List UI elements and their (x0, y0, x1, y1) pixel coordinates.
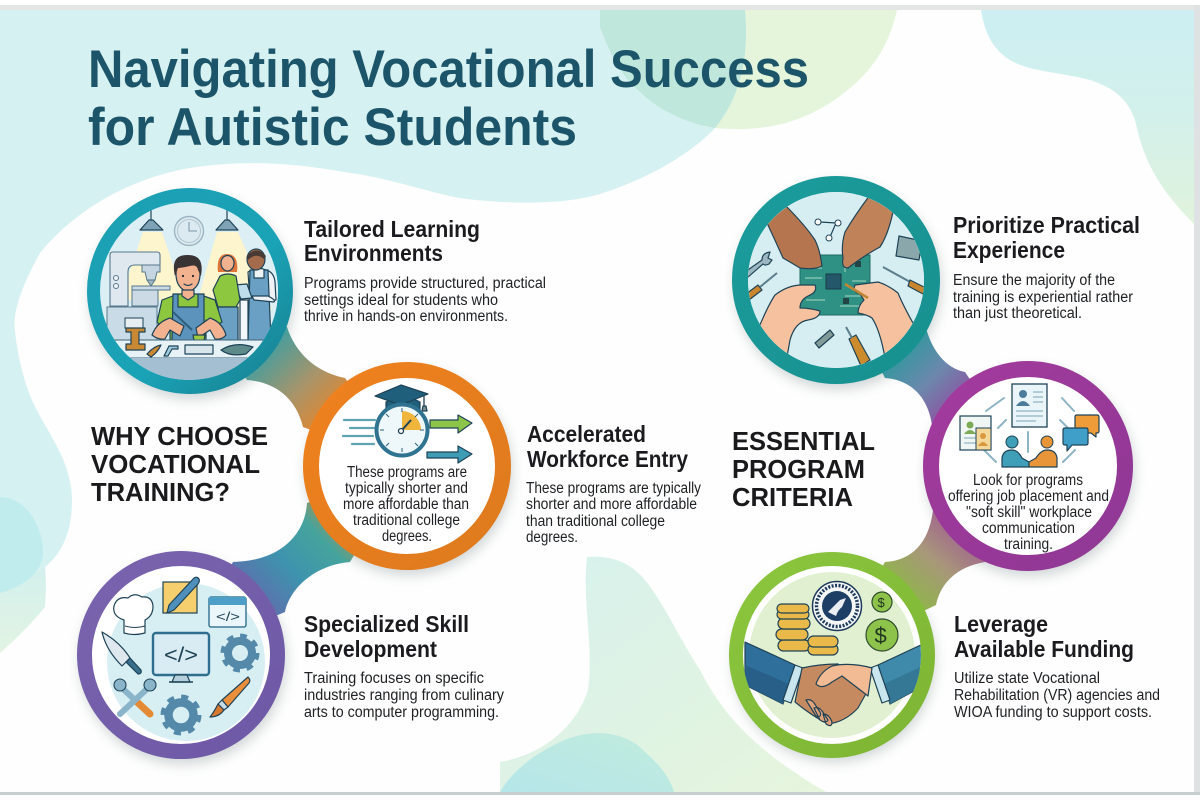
heading: accelerated workforce entry: Workforce Entry (527, 446, 688, 472)
text: accelerated entry in circle (343, 464, 469, 545)
instructor with tablet (234, 249, 276, 341)
text: accelerated entry in circle: degrees. (382, 528, 432, 545)
text: tailored learning description (304, 275, 546, 325)
text: accelerated entry description (526, 480, 701, 546)
icon: skills tools cluster (102, 577, 265, 741)
wrench and screwdriver (122, 688, 150, 714)
connector: tailored learning to accelerated entry (190, 291, 407, 466)
panel: specialized skill development (84, 558, 504, 752)
text: funding description: WIOA funding to support costs. (954, 704, 1152, 721)
title: Navigating Vocational Success (88, 40, 809, 99)
gears (163, 636, 257, 733)
text: job placement in circle: offering job placement and (948, 488, 1109, 505)
magenta ring (931, 369, 1125, 563)
heading: essential program criteria: CRITERIA (732, 482, 853, 512)
connector: job placement to funding (832, 466, 1028, 655)
handshake (795, 664, 868, 724)
icon: hands assembling circuit board (745, 190, 926, 370)
text: funding description: Rehabilitation (VR) agencies and (954, 687, 1160, 704)
text: accelerated entry in circle: typically shorter and (345, 480, 468, 497)
text: job placement in circle: "soft skill" workplace (966, 504, 1092, 521)
green ring (736, 559, 928, 751)
text: specialized skill description: Training focuses on specific (304, 670, 484, 687)
dollar coins (872, 592, 892, 612)
text: job placement in circle: training. (1004, 536, 1053, 553)
heading: prioritize practical experience: Experience (953, 237, 1065, 263)
sleeves (745, 642, 795, 704)
icon: resumes people and speech bubbles (960, 384, 1099, 467)
text: job placement in circle: Look for programs (973, 472, 1083, 489)
panel: leverage available funding (736, 559, 1160, 751)
text: practical experience description: Ensure the majority of the (953, 272, 1115, 289)
heading: tailored learning: Tailored Learning (304, 216, 480, 242)
text: accelerated entry in circle: traditional college (353, 512, 460, 529)
panel: job placement and soft skills (931, 369, 1125, 563)
hand: lower left (760, 284, 821, 354)
coins (776, 604, 838, 655)
heading: essential program criteria: ESSENTIAL (732, 426, 875, 456)
connector: accelerated entry to specialized skills (181, 466, 407, 655)
text: practical experience description: training is experiential rather (953, 289, 1133, 306)
heading: why choose vocational training (91, 421, 268, 507)
teal ring (94, 196, 286, 386)
text: tailored learning description: Programs provide structured, practical (304, 275, 546, 292)
hand: upper right (842, 198, 894, 269)
heading: accelerated workforce entry: Accelerated (527, 421, 646, 447)
teal ring (740, 184, 932, 376)
panel: accelerated workforce entry (311, 370, 701, 562)
heading: tailored learning: Environments (304, 240, 443, 266)
text: funding description (954, 670, 1160, 721)
text: practical experience description: than just theoretical. (953, 305, 1082, 322)
knife (102, 632, 130, 666)
icon: coins badge and handshake: $ (878, 595, 886, 610)
heading: tailored learning (304, 216, 480, 266)
workbench (114, 318, 264, 380)
code window (209, 597, 246, 627)
icon: timer with graduation cap and arrows (343, 385, 472, 463)
note and pen (163, 582, 197, 613)
text: accelerated entry description: These programs are typically (526, 480, 701, 497)
student with orange hair (213, 254, 240, 341)
heading: accelerated workforce entry (527, 421, 688, 472)
heading: why choose vocational training: VOCATIONAL (91, 449, 260, 479)
main student (152, 255, 226, 346)
heading: why choose vocational training: WHY CHOOSE (91, 421, 268, 451)
heading: specialized skill development (304, 611, 469, 662)
icon: skills tools cluster: </> (164, 644, 198, 667)
title: for Autistic Students (88, 98, 577, 157)
program badge (812, 582, 862, 630)
heading: essential program criteria (732, 426, 875, 512)
milling machine (107, 252, 170, 341)
text: accelerated entry description: shorter and more affordable (526, 496, 697, 513)
heading: why choose vocational training: TRAINING? (91, 477, 230, 507)
text: accelerated entry description: degrees. (526, 529, 578, 546)
paint brush (222, 677, 250, 707)
text: job placement in circle: communication (982, 520, 1075, 537)
orange ring (311, 370, 503, 562)
text: tailored learning description: thrive in hands-on environments. (304, 308, 508, 325)
panel: prioritize practical experience (740, 184, 1140, 376)
monitor (153, 633, 209, 675)
icon: coins badge and handshake: $ (874, 623, 887, 648)
heading: leverage available funding: Available Funding (954, 636, 1134, 662)
hand: upper left (767, 206, 823, 270)
tools (745, 219, 926, 366)
circle shadows (80, 183, 1134, 764)
icon: workshop scene (100, 202, 278, 380)
heading: essential program criteria: PROGRAM (732, 454, 865, 484)
text: specialized skill description (304, 670, 504, 721)
hand: lower right (854, 281, 914, 354)
heading: specialized skill development: Specialized Skill (304, 611, 469, 637)
text: funding description: Utilize state Vocational (954, 670, 1100, 687)
connector: practical experience to job placement (836, 280, 1028, 466)
text: accelerated entry description: than traditional college (526, 513, 665, 530)
circuit board (800, 255, 870, 315)
text: specialized skill description: industries ranging from culinary (304, 687, 504, 704)
text: tailored learning description: settings ideal for students who (304, 292, 498, 309)
heading: specialized skill development: Development (304, 636, 437, 662)
heading: leverage available funding (954, 611, 1134, 662)
heading: prioritize practical experience: Prioritize Practical (953, 212, 1140, 238)
text: accelerated entry in circle: These programs are (347, 464, 467, 481)
text: practical experience description (953, 272, 1133, 322)
icon: coins badge and handshake (745, 572, 925, 738)
purple ring (84, 558, 278, 752)
panel: tailored learning (94, 195, 546, 390)
chef hat (114, 595, 153, 634)
title (88, 40, 809, 157)
heading: prioritize practical experience (953, 212, 1140, 263)
heading: leverage available funding: Leverage (954, 611, 1048, 637)
text: specialized skill description: arts to computer programming. (304, 704, 499, 721)
text: job placement in circle (948, 472, 1109, 553)
icon: skills tools cluster: </> (216, 609, 240, 624)
text: accelerated entry in circle: more affordable than (343, 496, 469, 513)
